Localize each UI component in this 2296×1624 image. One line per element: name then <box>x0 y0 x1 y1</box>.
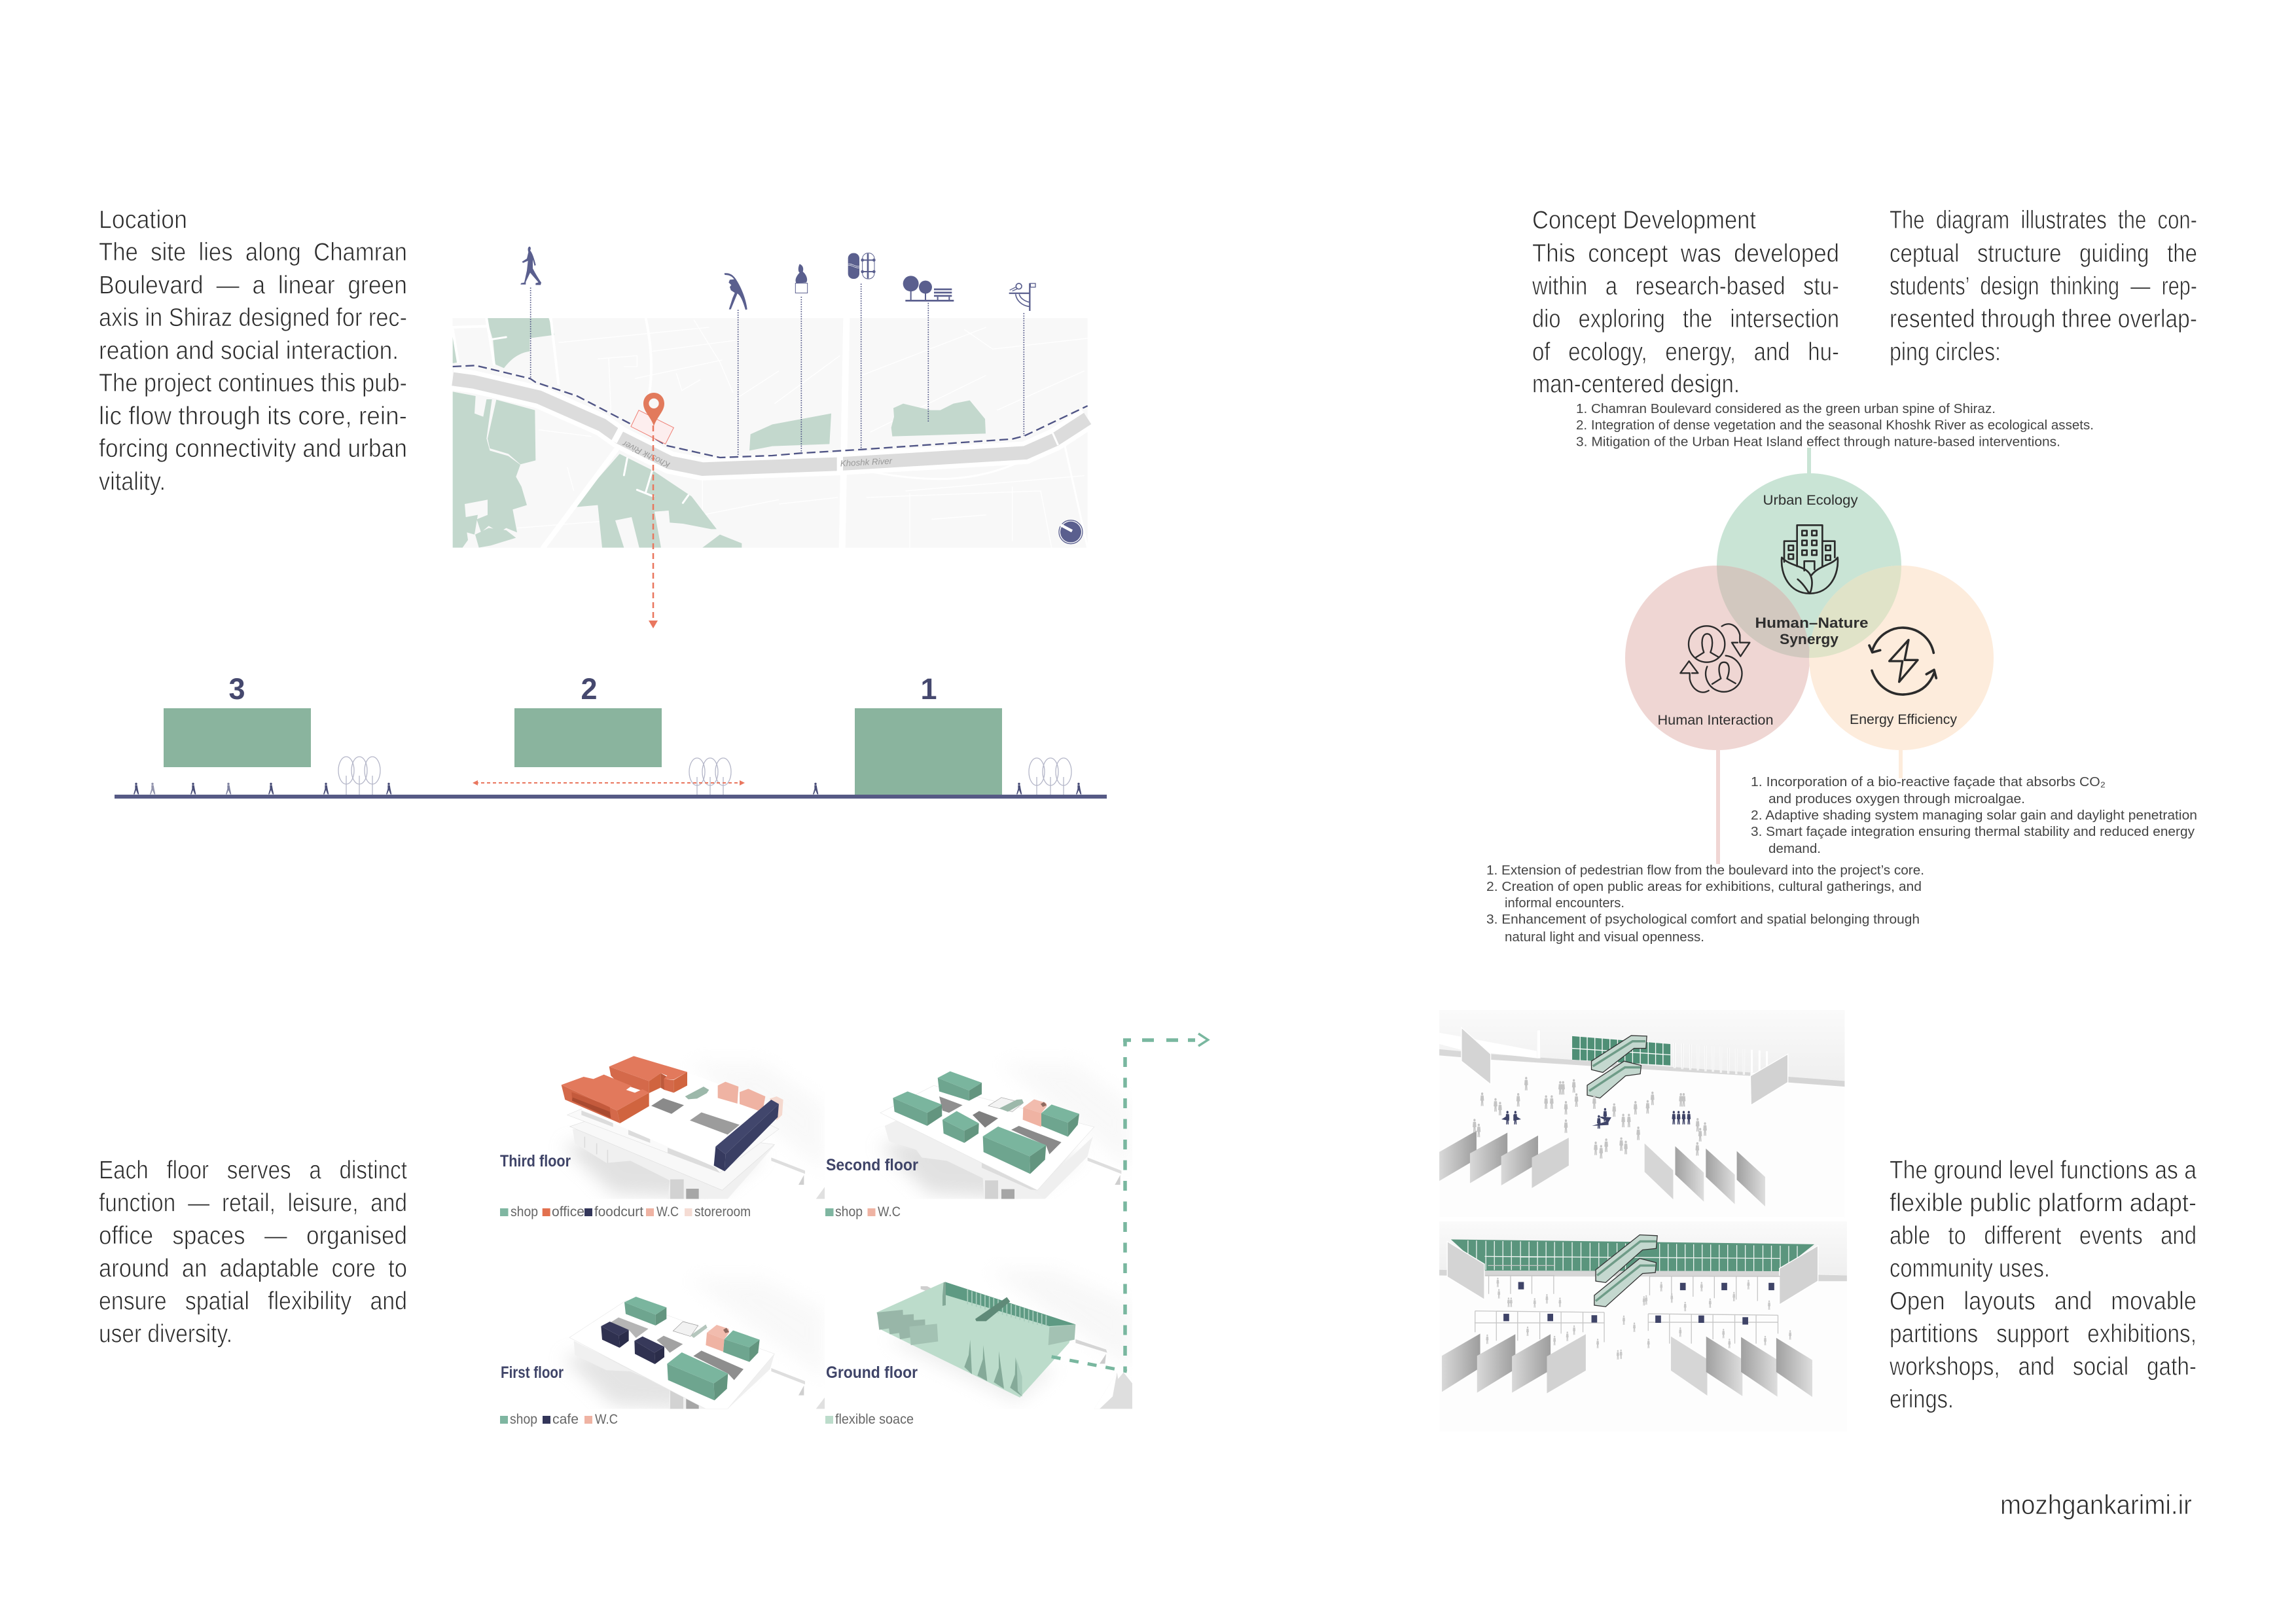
open ground dimension arrow <box>473 780 745 785</box>
text block: floors: function — retail, leisure, and <box>99 1189 407 1218</box>
legend: third floor <box>500 1204 751 1219</box>
text block: ground level: community uses. <box>1890 1255 2050 1283</box>
label: synergy: Synergy <box>1780 631 1839 647</box>
label: first floor: First floor <box>501 1363 564 1382</box>
icon: walker <box>520 247 541 285</box>
text block: diagram intro <box>1890 206 2197 367</box>
text block: concept development: dio exploring the intersection <box>1532 305 1839 333</box>
text block: ground level: able to different events and <box>1890 1222 2197 1250</box>
text block: floors: Each floor serves a distinct <box>99 1157 407 1185</box>
label: energy efficiency: Energy Efficiency <box>1850 712 1958 727</box>
icon: soccer field <box>1009 283 1035 311</box>
boulevard dashed route <box>453 365 1088 458</box>
legend: first floor: shop <box>510 1412 537 1427</box>
location map <box>453 247 1088 548</box>
text block: location: The site lies along Chamran <box>99 238 407 266</box>
text block: concept development <box>1532 206 1839 398</box>
text block: diagram intro: resented through three overlap- <box>1890 305 2197 333</box>
list: human interaction: 2. Creation of open public areas for exhibitions, cultural gatherings, and <box>1486 879 1922 894</box>
legend: third floor: shop <box>511 1204 538 1219</box>
number 2: 2 <box>581 672 598 706</box>
overlap: ecology and energy <box>1809 566 1901 658</box>
label: urban ecology: Urban Ecology <box>1763 493 1858 508</box>
list: energy efficiency: and produces oxygen through microalgae. <box>1768 791 2025 806</box>
label: synergy <box>1755 615 1868 647</box>
text block: diagram intro: students’ design thinking — rep- <box>1890 272 2197 300</box>
text block: floors: around an adaptable core to <box>99 1255 407 1283</box>
text block: floors: office spaces — organised <box>99 1222 407 1250</box>
list: human interaction: 3. Enhancement of psychological comfort and spatial belonging through <box>1486 912 1920 927</box>
text block: ground level: erings. <box>1890 1386 1954 1414</box>
text block: location: Location <box>99 206 187 234</box>
river label: Khoshk River <box>840 456 893 469</box>
list: energy efficiency: 1. Incorporation of a bio-reactive façade that absorbs CO₂ <box>1751 774 2106 789</box>
text block: location: reation and social interaction. <box>99 336 399 365</box>
label: second floor: Second floor <box>826 1156 918 1174</box>
circle: human interaction <box>1625 566 1810 750</box>
floor axonometric diagrams <box>512 1034 1208 1409</box>
legend: second floor: W.C <box>878 1204 901 1219</box>
list: urban ecology: 3. Mitigation of the Urban Heat Island effect through nature-based interventions. <box>1576 435 2060 449</box>
text block: ground level: The ground level functions as a <box>1890 1157 2197 1185</box>
dotted leader lines <box>531 283 1024 456</box>
dashed green circulation arrow <box>1052 1034 1208 1371</box>
perspective: event layout <box>1439 1010 1844 1218</box>
legend: first floor: cafe <box>552 1412 579 1427</box>
text block: concept development: This concept was developed <box>1532 240 1839 268</box>
text block: location: The project continues this pub- <box>99 369 407 397</box>
north sign <box>1059 520 1083 544</box>
text block: ground level: Open layouts and movable <box>1890 1288 2197 1316</box>
legend: second floor <box>825 1204 901 1219</box>
number 1: 1 <box>920 672 937 706</box>
legend: second floor: shop <box>835 1204 863 1219</box>
building 3 <box>164 708 311 767</box>
icon: people exchange <box>1680 624 1749 693</box>
list: energy efficiency <box>1751 774 2197 856</box>
list: energy efficiency: demand. <box>1768 841 1821 856</box>
panel: first floor <box>568 1297 825 1409</box>
red site-to-section arrow <box>649 425 658 628</box>
text block: location: axis in Shiraz designed for rec- <box>99 304 407 332</box>
list: human interaction <box>1486 863 1924 945</box>
text block: location <box>99 206 407 496</box>
building 1 <box>855 708 1002 795</box>
ground level perspectives <box>1439 1010 1847 1432</box>
legend: third floor: storeroom <box>694 1204 751 1219</box>
circle: energy efficiency <box>1809 566 1994 750</box>
panel: third floor <box>562 1056 825 1199</box>
list: human interaction: 1. Extension of pedestrian flow from the boulevard into the project’s core. <box>1486 863 1924 878</box>
map pin <box>643 393 664 426</box>
list: energy efficiency: 2. Adaptive shading system managing solar gain and daylight penetration <box>1751 808 2197 823</box>
legend: ground floor: flexible soace <box>835 1412 914 1427</box>
text block: diagram intro: ping circles: <box>1890 338 2001 367</box>
list: energy efficiency: 3. Smart façade integration ensuring thermal stability and reduced energy <box>1751 824 2195 839</box>
text block: diagram intro: The diagram illustrates the con- <box>1890 206 2197 234</box>
panel: second floor <box>880 1071 1122 1199</box>
section diagram <box>115 672 1107 799</box>
list: urban ecology: 2. Integration of dense vegetation and the seasonal Khoshk River as ecological assets. <box>1576 418 2094 433</box>
label: ground floor: Ground floor <box>826 1363 918 1382</box>
legend: third floor: office <box>552 1204 584 1219</box>
icon: energy cycle <box>1869 628 1936 695</box>
text block: location: forcing connectivity and urban <box>99 435 407 463</box>
list: urban ecology: 1. Chamran Boulevard considered as the green urban spine of Shiraz. <box>1576 401 1996 416</box>
site plot <box>631 410 673 444</box>
text block: floors <box>99 1157 407 1348</box>
circle: urban ecology <box>1717 473 1901 658</box>
label: third floor: Third floor <box>500 1152 571 1170</box>
text block: floors: ensure spatial flexibility and <box>99 1288 407 1316</box>
text block: concept development: Concept Development <box>1532 206 1756 234</box>
ground line <box>115 795 1107 799</box>
legend: third floor: W.C <box>656 1204 679 1219</box>
text block: ground level: workshops, and social gath- <box>1889 1353 2197 1381</box>
icon: trees and bench <box>903 276 954 302</box>
building 2 <box>514 708 662 767</box>
panel: ground floor <box>876 1282 1132 1409</box>
text block: ground level: partitions support exhibitions, <box>1890 1320 2197 1348</box>
legend: first floor <box>500 1412 618 1427</box>
overlap: ecology and human <box>1717 566 1809 658</box>
text block: ground level: flexible public platform adapt- <box>1890 1189 2197 1218</box>
legend: third floor: foodcurt <box>594 1204 643 1219</box>
label: synergy: Human–Nature <box>1755 615 1868 631</box>
river label: Khoshk River <box>620 439 672 470</box>
legend: first floor: W.C <box>595 1412 618 1427</box>
text block: concept development: of ecology, energy, and hu- <box>1532 338 1839 367</box>
trees <box>338 757 1071 795</box>
text block: location: vitality. <box>99 467 166 496</box>
text block: diagram intro: ceptual structure guiding the <box>1890 240 2197 268</box>
text block: concept development: within a research-based stu- <box>1532 272 1839 300</box>
number 3: 3 <box>228 672 245 706</box>
text block: concept development: man-centered design. <box>1532 370 1740 398</box>
venn diagram <box>1625 448 1994 864</box>
text block: ground level <box>1889 1157 2197 1414</box>
text block: location: Boulevard — a linear green <box>99 271 407 300</box>
icon: skateboards <box>848 253 876 279</box>
website credit: mozhgankarimi.ir <box>2000 1489 2192 1520</box>
perspective: exhibition layout <box>1439 1221 1847 1432</box>
icon: statue <box>795 264 808 293</box>
list: human interaction: informal encounters. <box>1505 895 1624 911</box>
pedestrians <box>134 783 1081 795</box>
connector stems <box>1716 448 1903 864</box>
text block: floors: user diversity. <box>99 1320 232 1348</box>
list: urban ecology <box>1576 401 2094 449</box>
label: human interaction: Human Interaction <box>1657 713 1774 728</box>
icon: building in leaf <box>1782 525 1838 594</box>
icon: stretching figure <box>725 273 747 310</box>
text block: location: lic flow through its core, rein- <box>99 402 407 431</box>
list: human interaction: natural light and visual openness. <box>1505 929 1704 945</box>
